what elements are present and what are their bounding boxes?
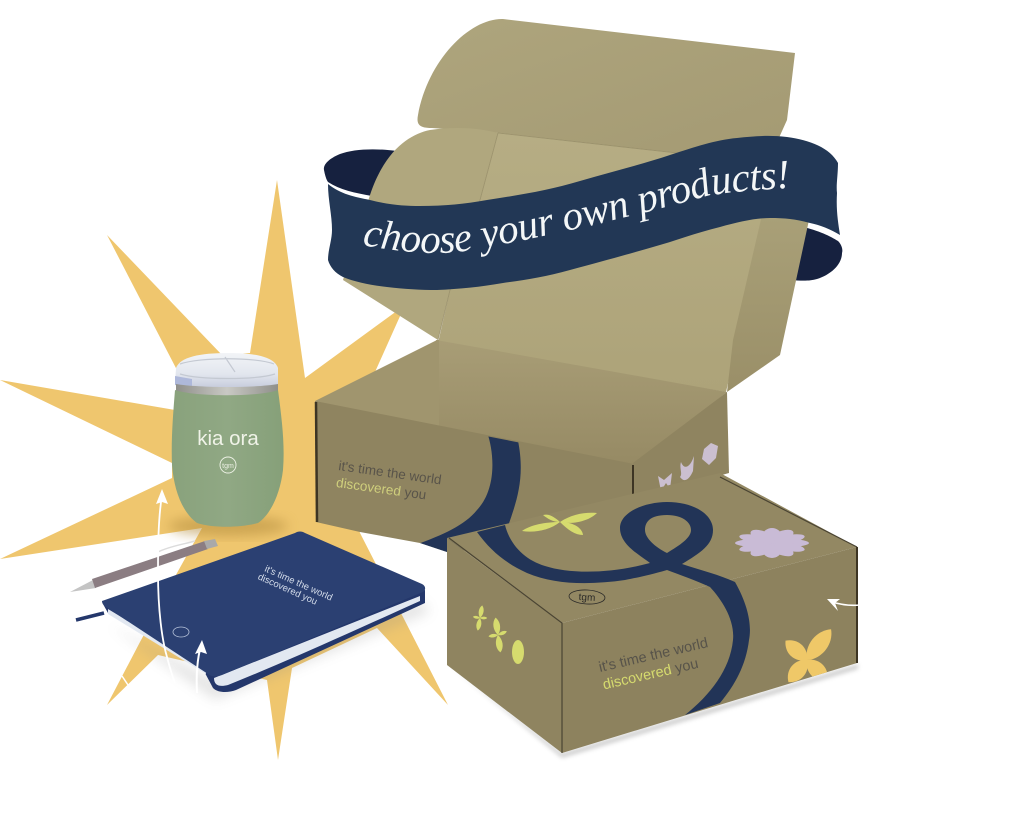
closed box: shadow <box>450 664 858 758</box>
notebook: ribbon bookmark <box>76 613 104 620</box>
starburst <box>0 180 448 760</box>
tumbler <box>168 353 288 536</box>
box: lilac flowers on side <box>658 443 718 491</box>
tumbler: body <box>172 390 284 527</box>
closed box: top <box>447 473 857 623</box>
closed box: logo: tgm <box>578 592 596 604</box>
tumbler: lid <box>175 353 278 388</box>
notebook: pages <box>108 596 420 686</box>
banner: text: choose your own products! <box>364 160 787 257</box>
tumbler: logo: tgm <box>222 463 234 470</box>
closed box: slogan: it's time the world <box>597 635 710 676</box>
closed box: right edge <box>856 547 858 663</box>
lid: crease lines <box>438 133 677 340</box>
pen: cap <box>204 539 218 549</box>
tumbler: shadow <box>168 516 288 536</box>
closed box: white arrow <box>827 599 860 611</box>
closed box: small lime flowers on left face <box>471 604 524 664</box>
box: corner fold <box>632 465 634 495</box>
banner: ribbon body <box>328 136 840 290</box>
notebook: front cover <box>102 532 425 676</box>
closed box: yellow flower on side <box>785 629 832 682</box>
pen: clip <box>158 541 195 552</box>
tumbler: steel ring <box>176 384 278 396</box>
closed box: right face <box>562 547 857 753</box>
closed box: navy ribbon with loop <box>477 502 750 715</box>
closed box <box>447 473 860 758</box>
white arrow: long <box>156 489 175 683</box>
lid: left flap <box>343 128 498 340</box>
pen: barrel <box>92 541 208 588</box>
box: right face <box>633 392 729 500</box>
box: ribbon on front face <box>420 436 521 552</box>
notebook: slogan: discovered you <box>256 572 319 608</box>
closed box: left face <box>447 538 562 753</box>
pen: tip <box>70 580 96 592</box>
box: inside left wall <box>315 340 439 430</box>
tumbler: logo <box>220 457 236 473</box>
infographic: product box set <box>0 19 860 760</box>
box: slogan: it's time the world <box>338 458 443 487</box>
box: slogan <box>335 458 443 504</box>
tumbler: lid highlights <box>180 357 275 378</box>
notebook: logo <box>173 627 189 637</box>
closed box: slogan: discovered you <box>601 656 700 693</box>
closed box: fold lines <box>449 477 857 753</box>
pen <box>70 539 218 592</box>
notebook: back cover <box>103 590 425 692</box>
lid: outer panel with tab <box>418 19 795 153</box>
banner <box>328 136 840 290</box>
tumbler: lid rim <box>175 376 192 386</box>
box: front face <box>315 401 634 552</box>
notebook: slogan: it's time the world <box>263 564 334 603</box>
white tick on star ray <box>122 676 128 685</box>
lid: right flap <box>727 215 809 392</box>
ribbon tail: right <box>790 226 842 281</box>
box: inside back wall <box>436 340 727 466</box>
notebook <box>76 532 430 700</box>
notebook: shadow <box>110 600 430 700</box>
closed box: lilac flower on top <box>735 528 809 558</box>
open box <box>315 19 809 556</box>
ribbon tail: left <box>324 149 397 196</box>
box: dark front edge <box>316 402 317 522</box>
tumbler: text: kia ora <box>197 427 259 450</box>
closed box: lime flower on top <box>522 513 597 535</box>
lid: main panel <box>438 133 790 392</box>
box: slogan: discovered you <box>335 475 427 502</box>
closed box: slogan <box>597 635 714 693</box>
closed box: logo <box>569 589 605 605</box>
white arrow: short <box>195 640 207 693</box>
